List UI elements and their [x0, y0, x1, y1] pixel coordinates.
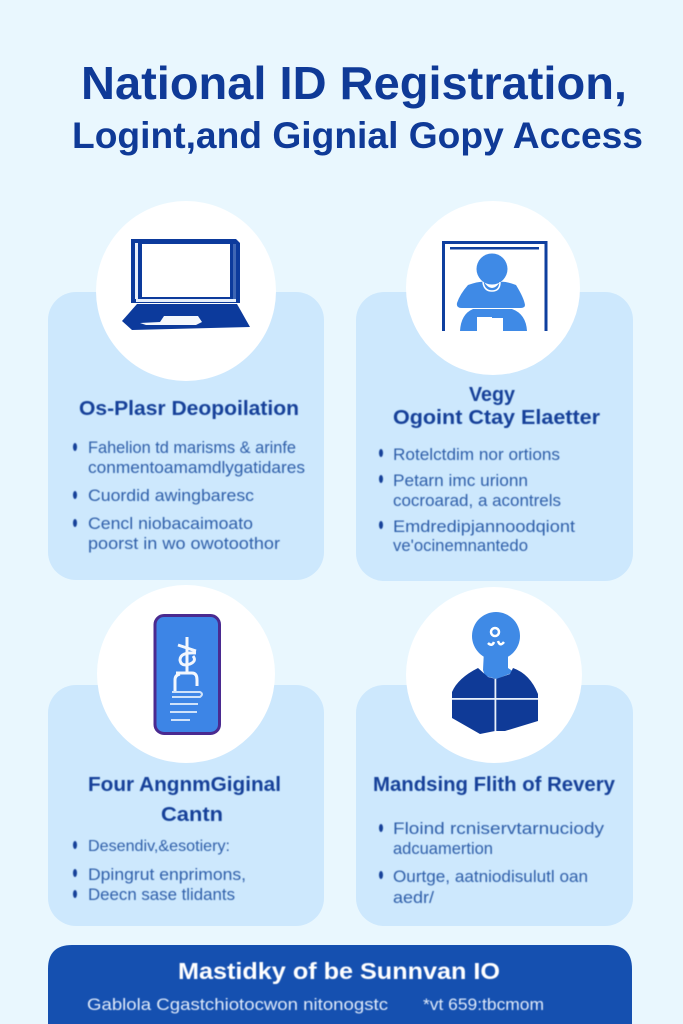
- card heading: Ogoint Ctay Elaetter: [393, 407, 600, 429]
- footer text: Gablola Cgastchiotocwon nitonogstc: [87, 995, 389, 1014]
- bullet list: Emdredipjannoodqiont: [393, 517, 575, 536]
- bullet list: Rotelctdim nor ortions: [393, 445, 560, 464]
- bullet list: [379, 819, 605, 907]
- card heading: Vegy: [469, 384, 516, 406]
- card heading: Cantn: [161, 804, 223, 826]
- icon: phone: [155, 616, 220, 734]
- icon: person with bulb head: [452, 612, 538, 734]
- bullet list: aedr/: [393, 888, 434, 907]
- bullet list: Fahelion td marisms & arinfe: [88, 438, 296, 457]
- bullet list: Cencl niobacaimoato: [88, 514, 253, 533]
- card heading: [393, 384, 600, 429]
- icon: person in frame: [444, 242, 546, 331]
- title: National ID Registration,: [81, 57, 627, 109]
- bullet list: [379, 445, 575, 555]
- card heading: Os-Plasr Deopoilation: [79, 398, 299, 420]
- bullet list: Floind rcniservtarnuciody: [393, 819, 605, 838]
- icon: laptop: [122, 239, 250, 330]
- card heading: [88, 774, 281, 826]
- card heading: Mandsing Flith of Revery: [373, 774, 616, 796]
- bullet list: Ourtge, aatniodisulutl oan: [393, 867, 588, 886]
- title: Logint,and Gignial Gopy Access: [72, 115, 643, 156]
- bullet list: Dpingrut enprimons,: [88, 865, 246, 884]
- bullet list: adcuamertion: [393, 839, 493, 858]
- footer banner: [48, 945, 632, 1024]
- panel: very ogoint ctay elaetter: [356, 201, 633, 581]
- bullet list: poorst in wo owotoothor: [88, 534, 280, 553]
- bullet list: [73, 438, 305, 553]
- bullet list: Desendiv,&esotiery:: [88, 838, 230, 855]
- footer text: [87, 995, 544, 1014]
- bullet list: [73, 838, 246, 904]
- bullet list: cocroarad, a acontrels: [393, 491, 561, 510]
- footer heading: Mastidky of be Sunnvan IO: [178, 958, 500, 984]
- title: [72, 57, 643, 156]
- bullet list: Cuordid awingbaresc: [88, 486, 255, 505]
- card heading: Four AngnmGiginal: [88, 774, 281, 796]
- bullet list: Deecn sase tlidants: [88, 885, 235, 904]
- bullet list: conmentoamamdlygatidares: [88, 458, 305, 477]
- bullet list: Petarn imc urionn: [393, 471, 528, 490]
- panel: manding flith of revery: [356, 587, 633, 926]
- panel: four angnm giginal cantn: [48, 585, 324, 926]
- bullet list: ve'ocinemnantedo: [393, 536, 528, 555]
- footer text: *vt 659:tbcmom: [423, 995, 544, 1014]
- panel: on-plasr depopulation: [48, 201, 324, 580]
